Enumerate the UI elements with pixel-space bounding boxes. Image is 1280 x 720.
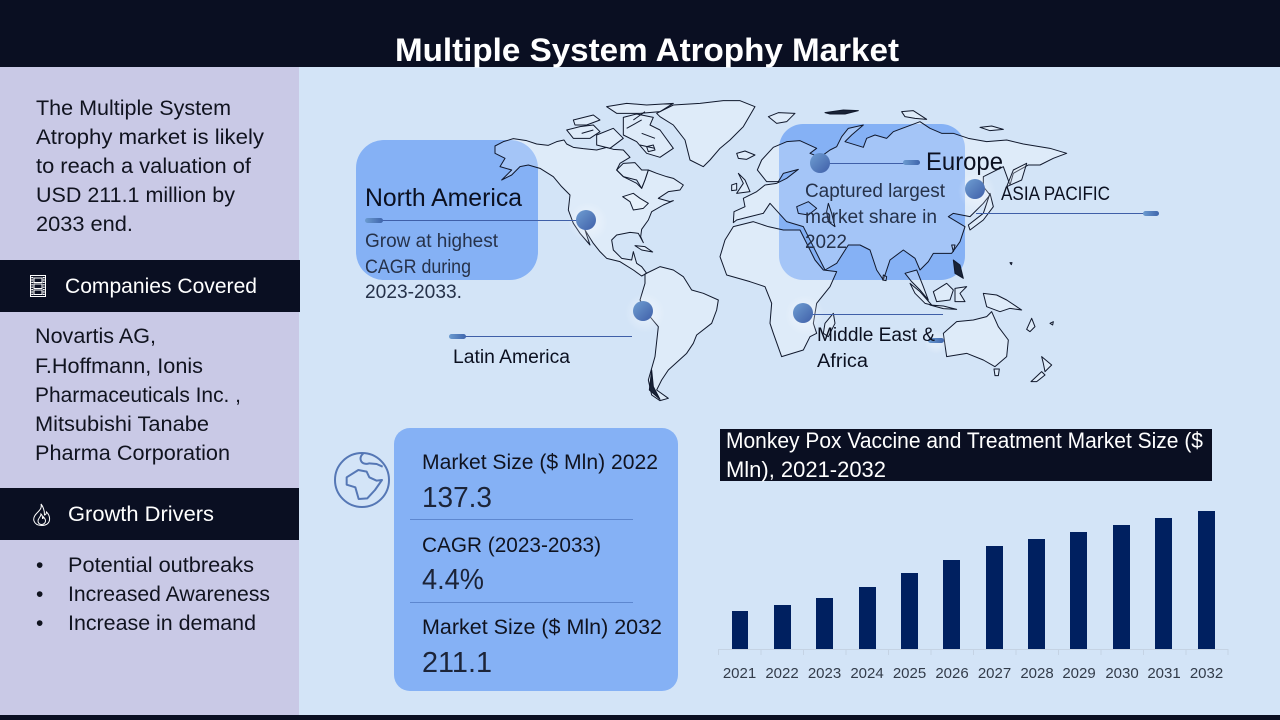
axis labels: 2021 — [723, 665, 756, 682]
Ireland — [732, 183, 737, 191]
stat: CAGR: 4.4% — [422, 564, 484, 596]
list: companies: Novartis AG, — [35, 325, 156, 348]
stat: market size 2032 — [422, 616, 662, 679]
Pacific islets — [1010, 263, 1053, 332]
marker and label: Europe: Europe — [926, 148, 1003, 176]
axis labels: 2028 — [1020, 665, 1054, 682]
list: growth drivers: • — [36, 554, 43, 577]
stat: market size 2022: Market Size ($ Mln) 2022 — [422, 451, 658, 474]
title: Multiple System Atrophy Market — [395, 32, 899, 68]
Franz Josef Land — [825, 110, 858, 114]
New Siberian Islands — [902, 111, 927, 119]
heading: companies covered: Companies Covered — [65, 275, 257, 298]
callout box: North America — [356, 140, 538, 280]
list: growth drivers: Increase in demand — [68, 612, 256, 635]
Eurasia — [733, 122, 1067, 280]
stat: market size 2032: 211.1 — [422, 647, 492, 679]
marker: North America — [365, 202, 608, 242]
heading: chart title — [720, 428, 1212, 482]
Caspian Sea — [827, 203, 835, 227]
list: companies: F.Hoffmann, Ionis — [35, 355, 203, 378]
Japan — [968, 193, 993, 230]
axis labels: 2024 — [850, 665, 884, 682]
Australia — [943, 312, 1008, 367]
heading: chart title: Monkey Pox Vaccine and Treatment Market Size ($ — [726, 428, 1203, 453]
heading: companies covered — [0, 260, 300, 312]
list: growth drivers: Increased Awareness — [68, 583, 270, 606]
Sumatra — [910, 283, 932, 305]
Cuba — [635, 246, 653, 252]
callout text: North America: CAGR during — [365, 257, 471, 278]
marker and label: Middle East and Africa — [785, 295, 948, 372]
marker and label: Middle East and Africa: Middle East & — [817, 325, 935, 346]
Philippines — [953, 260, 963, 278]
icon: flame — [34, 504, 50, 526]
bars — [732, 511, 1215, 649]
market summary text: 2033 end. — [36, 213, 133, 236]
Taiwan — [952, 245, 955, 252]
list: growth drivers: • — [36, 612, 43, 635]
callout text: North America — [365, 184, 522, 303]
Java — [930, 305, 957, 309]
list: companies: Mitsubishi Tanabe — [35, 413, 209, 436]
panel: market statistics — [394, 428, 678, 691]
stat: CAGR: CAGR (2023-2033) — [422, 534, 601, 557]
Sri Lanka — [883, 275, 887, 281]
Tasmania — [994, 369, 999, 376]
heading: growth drivers: Growth Drivers — [68, 503, 214, 526]
axis labels: 2030 — [1105, 665, 1139, 682]
Wrangel Island — [980, 126, 1003, 131]
icon: film strip — [30, 276, 46, 296]
axis labels: 2023 — [808, 665, 841, 682]
list: growth drivers: Potential outbreaks — [68, 554, 254, 577]
list: growth drivers: • — [36, 583, 43, 606]
Tierra del Fuego coast — [649, 370, 660, 399]
callout text: North America: 2023-2033. — [365, 282, 462, 303]
Sulawesi — [955, 287, 967, 302]
United Kingdom — [737, 173, 750, 193]
axis labels: 2026 — [935, 665, 969, 682]
Madagascar — [823, 313, 835, 337]
world map: Eurasia, Africa, Oceania — [720, 110, 1067, 382]
stat: CAGR — [422, 534, 601, 596]
market summary text: USD 211.1 million by — [36, 184, 236, 207]
axis labels: 2029 — [1062, 665, 1096, 682]
market summary text: The Multiple System — [36, 97, 231, 120]
stat: market size 2022: 137.3 — [422, 482, 492, 514]
marker and label: Middle East and Africa: Africa — [817, 351, 868, 372]
axis labels: 2032 — [1190, 665, 1223, 682]
panel: left sidebar — [0, 67, 300, 715]
list: companies: Pharma Corporation — [35, 442, 230, 465]
heading: chart title: Mln), 2021-2032 — [726, 457, 886, 482]
marker and label: Europe: market share in — [805, 207, 937, 228]
callout text: North America: North America — [365, 184, 522, 212]
Great Lakes — [623, 193, 648, 210]
Sakhalin — [1007, 163, 1027, 187]
Arctic islands — [567, 125, 600, 138]
market summary text: to reach a valuation of — [36, 155, 251, 178]
bar chart — [718, 511, 1228, 682]
North America — [495, 139, 683, 276]
stat: market size 2022 — [422, 451, 658, 514]
axis labels: 2027 — [978, 665, 1011, 682]
callout box: Europe — [779, 124, 965, 280]
Greenland — [657, 101, 755, 167]
axis labels: 2025 — [893, 665, 926, 682]
New Zealand — [1031, 357, 1052, 382]
Borneo — [933, 283, 953, 302]
New Guinea — [983, 293, 1022, 312]
Indochina — [905, 270, 928, 300]
marker and label: Latin America — [449, 293, 665, 368]
marker and label: Europe: 2022 — [805, 232, 847, 253]
heading: growth drivers — [0, 488, 299, 540]
footer bar — [0, 715, 1280, 720]
header bar — [0, 0, 1280, 67]
axis labels: 2022 — [765, 665, 799, 682]
axis labels — [723, 665, 1223, 682]
list: growth drivers — [36, 554, 270, 635]
Black Sea — [797, 202, 817, 215]
world map: Americas — [495, 101, 755, 401]
Svalbard — [768, 113, 795, 123]
marker and label: Asia Pacific: ASIA PACIFIC — [1001, 184, 1110, 205]
list: companies: Pharmaceuticals Inc. , — [35, 384, 241, 407]
Hudson Bay — [617, 163, 648, 188]
market summary text — [36, 97, 265, 236]
market summary text: Atrophy market is likely — [36, 126, 265, 149]
South America — [640, 267, 718, 401]
axis labels: 2031 — [1147, 665, 1181, 682]
marker and label: Latin America: Latin America — [453, 347, 570, 368]
callout text: North America: Grow at highest — [365, 231, 499, 252]
stat: market size 2032: Market Size ($ Mln) 2032 — [422, 616, 662, 639]
icon: globe — [335, 453, 389, 507]
marker and label: Europe: Captured largest — [805, 181, 946, 202]
marker and label: Asia Pacific — [958, 172, 1159, 216]
Iceland — [737, 151, 755, 159]
list: companies — [35, 325, 241, 465]
marker and label: Europe — [805, 148, 1003, 253]
Africa — [720, 222, 837, 357]
